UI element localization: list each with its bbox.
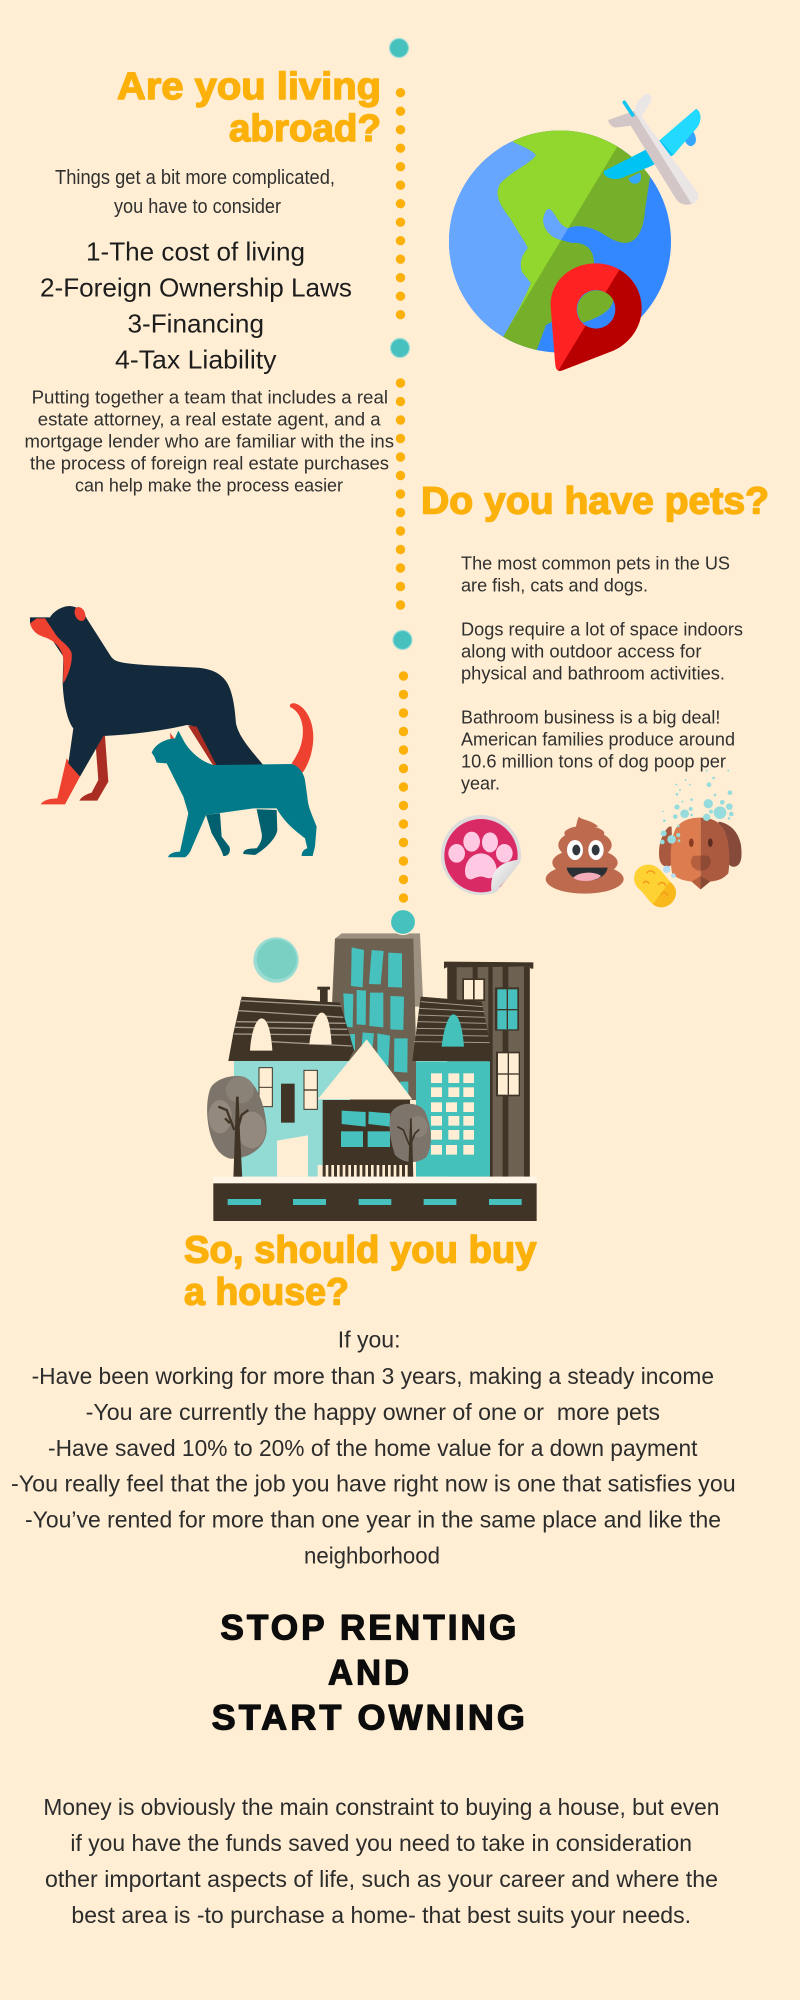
- pets paragraph 3: Bathroom business is a big deal!: [461, 707, 720, 727]
- section: pets: [30, 480, 769, 913]
- heading: Are you living abroad?: abroad?: [229, 108, 381, 150]
- right tall building: [444, 962, 533, 1177]
- numbered list of considerations: [40, 237, 352, 375]
- section: should you buy: [11, 1229, 736, 1928]
- checklist text: -Have been working for more than 3 years, making a steady income: [32, 1363, 714, 1389]
- checklist text: -You are currently the happy owner of one or more pets: [86, 1399, 660, 1425]
- section: living abroad: [24, 66, 700, 495]
- checklist text: [11, 1326, 736, 1568]
- timeline node 4: [390, 910, 416, 934]
- timeline node 2: [390, 338, 410, 358]
- illustration: town houses and road: [207, 933, 537, 1221]
- team paragraph: [24, 387, 394, 495]
- road: [213, 1177, 537, 1221]
- heading: Are you living abroad?: Are you living: [117, 66, 381, 108]
- heading: So, should you buy a house?: So, should you buy: [184, 1229, 536, 1271]
- closing paragraph: best area is -to purchase a home- that best suits your needs.: [71, 1902, 691, 1928]
- numbered list of considerations: 2-Foreign Ownership Laws: [40, 273, 352, 303]
- right tree: [390, 1104, 431, 1179]
- closing paragraph: Money is obviously the main constraint to buying a house, but even: [43, 1794, 719, 1820]
- timeline node 1: [390, 38, 408, 58]
- heading: Do you have pets?: Do you have pets?: [421, 480, 769, 522]
- timeline dots segment 2: [396, 378, 405, 610]
- left tree: [207, 1076, 267, 1179]
- checklist text: -You’ve rented for more than one year in the same place and like the: [25, 1506, 721, 1532]
- team paragraph: estate attorney, a real estate agent, and a: [38, 409, 382, 429]
- heading: Are you living abroad?: [117, 66, 381, 150]
- slogan: stop renting and start owning: STOP RENTING: [220, 1608, 519, 1647]
- soap bubbles: [660, 770, 734, 844]
- team paragraph: can help make the process easier: [75, 475, 343, 495]
- closing paragraph: other important aspects of life, such as your career and where the: [45, 1866, 718, 1892]
- pets paragraph 3: year.: [461, 773, 500, 793]
- pets paragraph 3: [461, 707, 735, 793]
- dog: [30, 605, 263, 804]
- central tower: [332, 933, 423, 1100]
- team paragraph: the process of foreign real estate purchases: [30, 453, 389, 473]
- checklist text: -You really feel that the job you have right now is one that satisfies you: [11, 1471, 736, 1497]
- slogan: stop renting and start owning: AND: [328, 1653, 412, 1692]
- heading: So, should you buy a house?: [184, 1229, 536, 1314]
- checklist text: If you:: [338, 1326, 400, 1352]
- intro text: [55, 167, 335, 218]
- team paragraph: Putting together a team that includes a real: [32, 387, 388, 407]
- pets paragraph 2: along with outdoor access for: [461, 641, 702, 661]
- intro text: Things get a bit more complicated,: [55, 167, 335, 189]
- right teal building: [412, 997, 492, 1177]
- closing paragraph: if you have the funds saved you need to take in consideration: [70, 1830, 692, 1856]
- dotted timeline: [390, 38, 412, 903]
- checklist text: neighborhood: [304, 1542, 440, 1568]
- numbered list of considerations: 1-The cost of living: [86, 237, 305, 267]
- team paragraph: mortgage lender who are familiar with the ins: [24, 431, 394, 451]
- globe: [449, 130, 671, 352]
- illustration: dog and cat: [30, 605, 317, 857]
- pets paragraph 3: American families produce around: [461, 729, 735, 749]
- pets paragraph 2: physical and bathroom activities.: [461, 663, 725, 683]
- icon: smiling poop: [546, 817, 624, 894]
- intro text: you have to consider: [114, 196, 281, 218]
- slogan: stop renting and start owning: [212, 1608, 528, 1737]
- pets paragraph 2: Dogs require a lot of space indoors: [461, 619, 743, 639]
- sun: [253, 937, 299, 983]
- heading: So, should you buy a house?: a house?: [184, 1272, 349, 1314]
- pets paragraph 1: The most common pets in the US: [461, 553, 730, 573]
- map pin: [550, 263, 642, 371]
- numbered list of considerations: 3-Financing: [128, 309, 264, 339]
- icon: dog being washed: [659, 770, 742, 889]
- middle house: [318, 1039, 412, 1177]
- icon: sponge: [634, 864, 676, 908]
- pets paragraph 3: 10.6 million tons of dog poop per: [461, 751, 726, 771]
- closing paragraph: [43, 1794, 719, 1928]
- cat: [152, 703, 317, 857]
- timeline dots segment 3: [399, 671, 408, 903]
- timeline dots segment 1: [396, 88, 405, 319]
- left house: [228, 987, 354, 1177]
- icon: globe with plane and map pin: [440, 94, 700, 383]
- pets paragraph 1: [461, 553, 730, 595]
- timeline node 3: [393, 630, 412, 650]
- pets paragraph 1: are fish, cats and dogs.: [461, 575, 648, 595]
- slogan: stop renting and start owning: START OWNING: [212, 1698, 528, 1737]
- pets paragraph 2: [461, 619, 743, 683]
- checklist text: -Have saved 10% to 20% of the home value for a down payment: [48, 1435, 698, 1461]
- numbered list of considerations: 4-Tax Liability: [115, 345, 276, 375]
- icon: paw sticker: [441, 815, 527, 897]
- plane: [604, 94, 700, 205]
